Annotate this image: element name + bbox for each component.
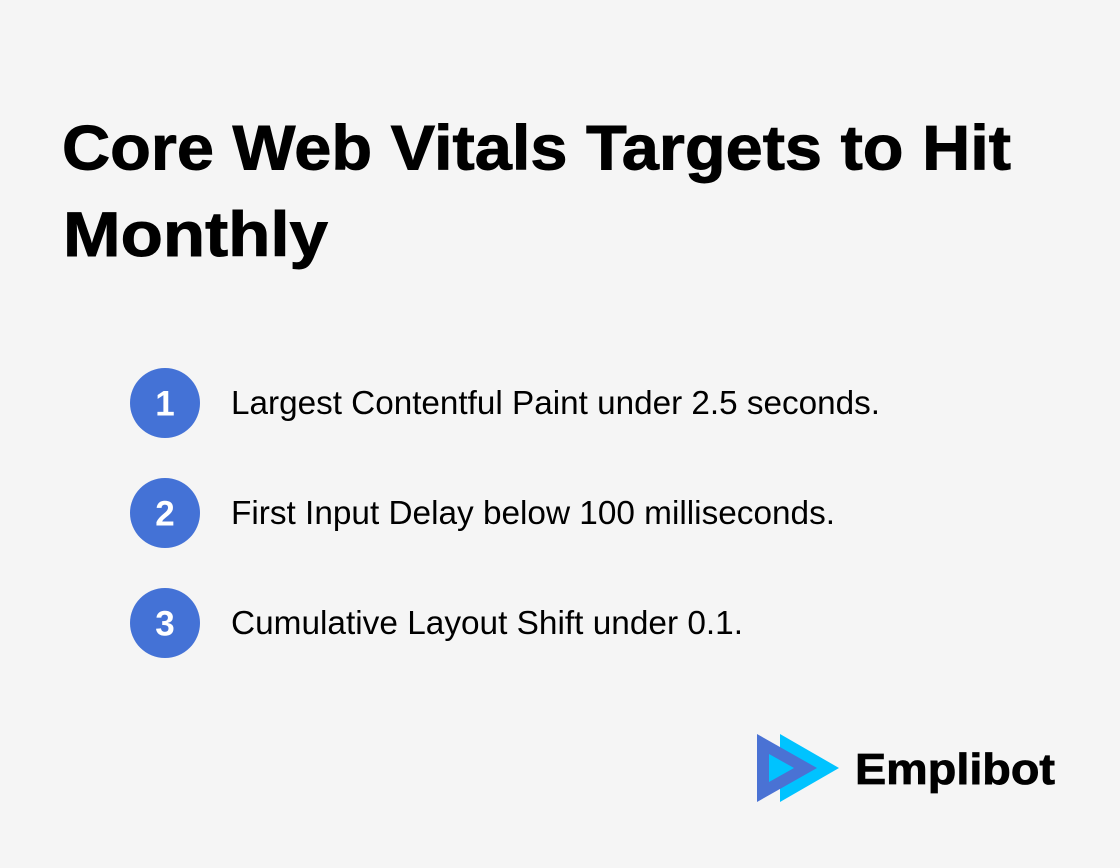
list item 1: Largest Contentful Paint under 2.5 seconds. — [231, 384, 880, 421]
title: Core Web Vitals Targets to Hit — [62, 114, 1011, 184]
list item 3: Cumulative Layout Shift under 0.1. — [231, 604, 743, 641]
logo: Emplibot — [757, 734, 1055, 802]
title — [62, 114, 1011, 270]
title: Monthly — [63, 200, 328, 270]
logo wordmark: Emplibot — [855, 745, 1055, 794]
list item 3 — [130, 588, 743, 658]
list item 1 — [130, 368, 880, 438]
icon: play triangles — [757, 734, 839, 802]
list item 2: First Input Delay below 100 milliseconds. — [231, 494, 835, 531]
list item 3: 3 — [155, 604, 175, 644]
list item 1: 1 — [155, 384, 175, 424]
list item 2 — [130, 478, 835, 548]
list item 2: 2 — [155, 494, 175, 534]
